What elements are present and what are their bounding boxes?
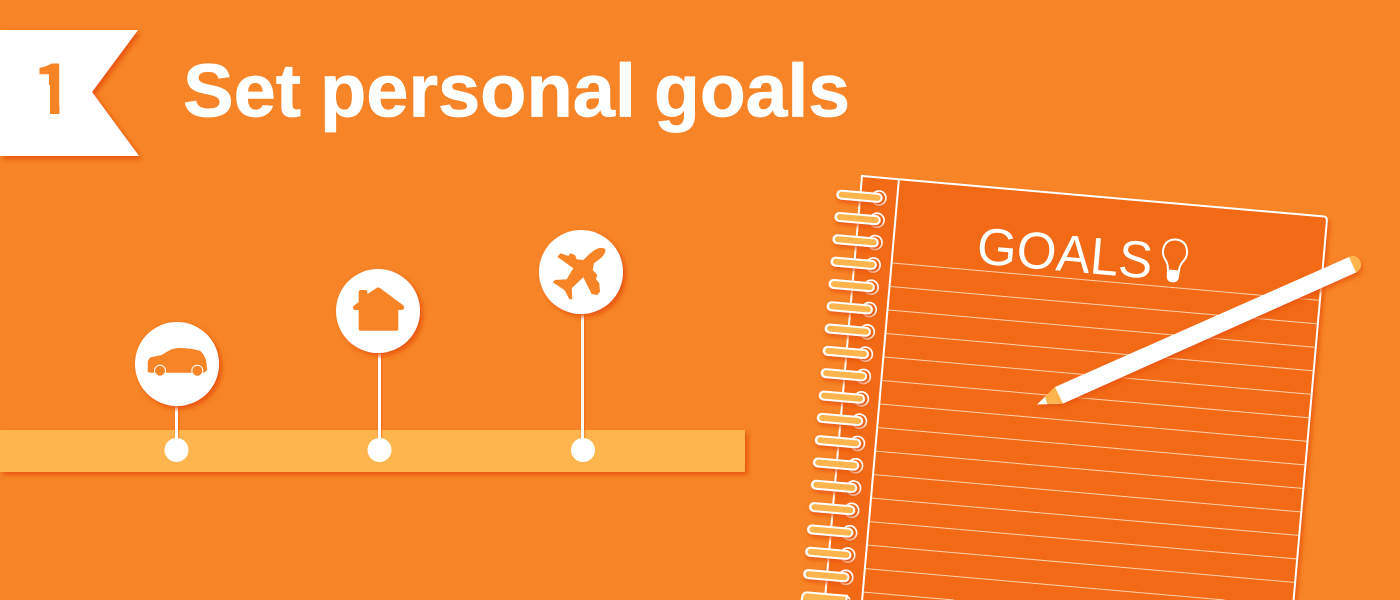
title	[183, 49, 850, 133]
notebook ruled lines	[864, 263, 1319, 600]
timeline bar	[0, 430, 745, 472]
milestone: plane	[539, 230, 623, 462]
notebook outline	[825, 176, 1327, 600]
step number: 1	[32, 34, 73, 135]
title: Set	[183, 49, 301, 133]
spiral binding rings	[801, 187, 887, 600]
icon: light bulb	[1160, 238, 1188, 283]
pencil cone band	[1045, 387, 1063, 404]
icon: plane	[553, 248, 605, 299]
number ribbon badge	[0, 30, 139, 156]
icon: house	[353, 288, 404, 331]
notebook margin line	[862, 179, 899, 600]
milestone: car	[135, 322, 219, 462]
milestone: house	[336, 269, 420, 462]
pencil	[1037, 256, 1361, 404]
title: goals	[654, 49, 850, 133]
panel: notebook	[801, 176, 1327, 600]
title: personal	[320, 49, 636, 133]
pencil eraser cap	[1349, 256, 1361, 272]
notebook heading: GOALS	[975, 217, 1155, 291]
icon: car	[148, 348, 207, 376]
